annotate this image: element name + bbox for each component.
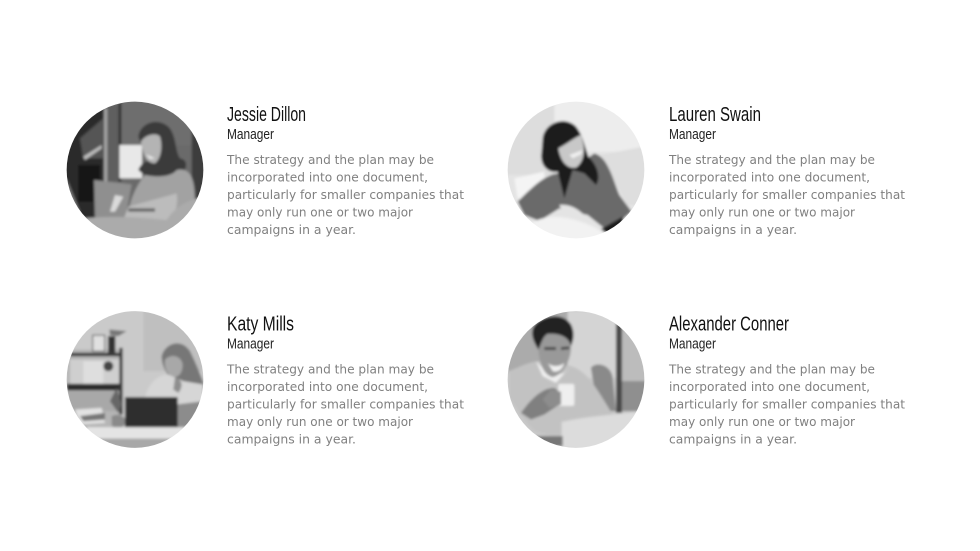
name: Lauren Swain [669,104,761,126]
role: Manager [669,336,716,352]
description: may only run one or two major [669,414,856,429]
description: incorporated into one document, [227,379,428,394]
description: campaigns in a year. [669,432,797,446]
description: The strategy and the plan may be [226,362,434,376]
description: campaigns in a year. [669,222,797,237]
description: particularly for smaller companies that [669,187,905,202]
photo: Lauren Swain [508,102,644,238]
role: Manager [227,336,274,352]
description: The strategy and the plan may be [226,152,434,167]
description: may only run one or two major [227,414,414,429]
description: may only run one or two major [669,204,856,220]
photo: Jessie Dillon [66,102,204,238]
description: may only run one or two major [227,204,414,220]
description: particularly for smaller companies that [227,396,464,412]
panel: Katy Mills [66,311,464,448]
panel: Jessie Dillon [66,102,464,238]
description: campaigns in a year. [227,222,356,237]
description: particularly for smaller companies that [227,187,464,202]
description: particularly for smaller companies that [669,396,905,412]
description: The strategy and the plan may be [668,152,875,167]
description: incorporated into one document, [669,379,870,394]
photo: Alexander Conner [508,311,644,448]
role: Manager [669,126,716,143]
description: The strategy and the plan may be [668,362,875,376]
description: incorporated into one document, [669,170,870,184]
role: Manager [227,126,274,143]
name: Katy Mills [227,314,294,336]
panel: Lauren Swain [508,102,905,238]
name: Alexander Conner [669,314,789,336]
name: Jessie Dillon [227,104,306,126]
description: campaigns in a year. [227,432,356,446]
photo: Katy Mills [66,311,204,448]
panel: Alexander Conner [508,311,905,448]
description: incorporated into one document, [227,170,428,184]
